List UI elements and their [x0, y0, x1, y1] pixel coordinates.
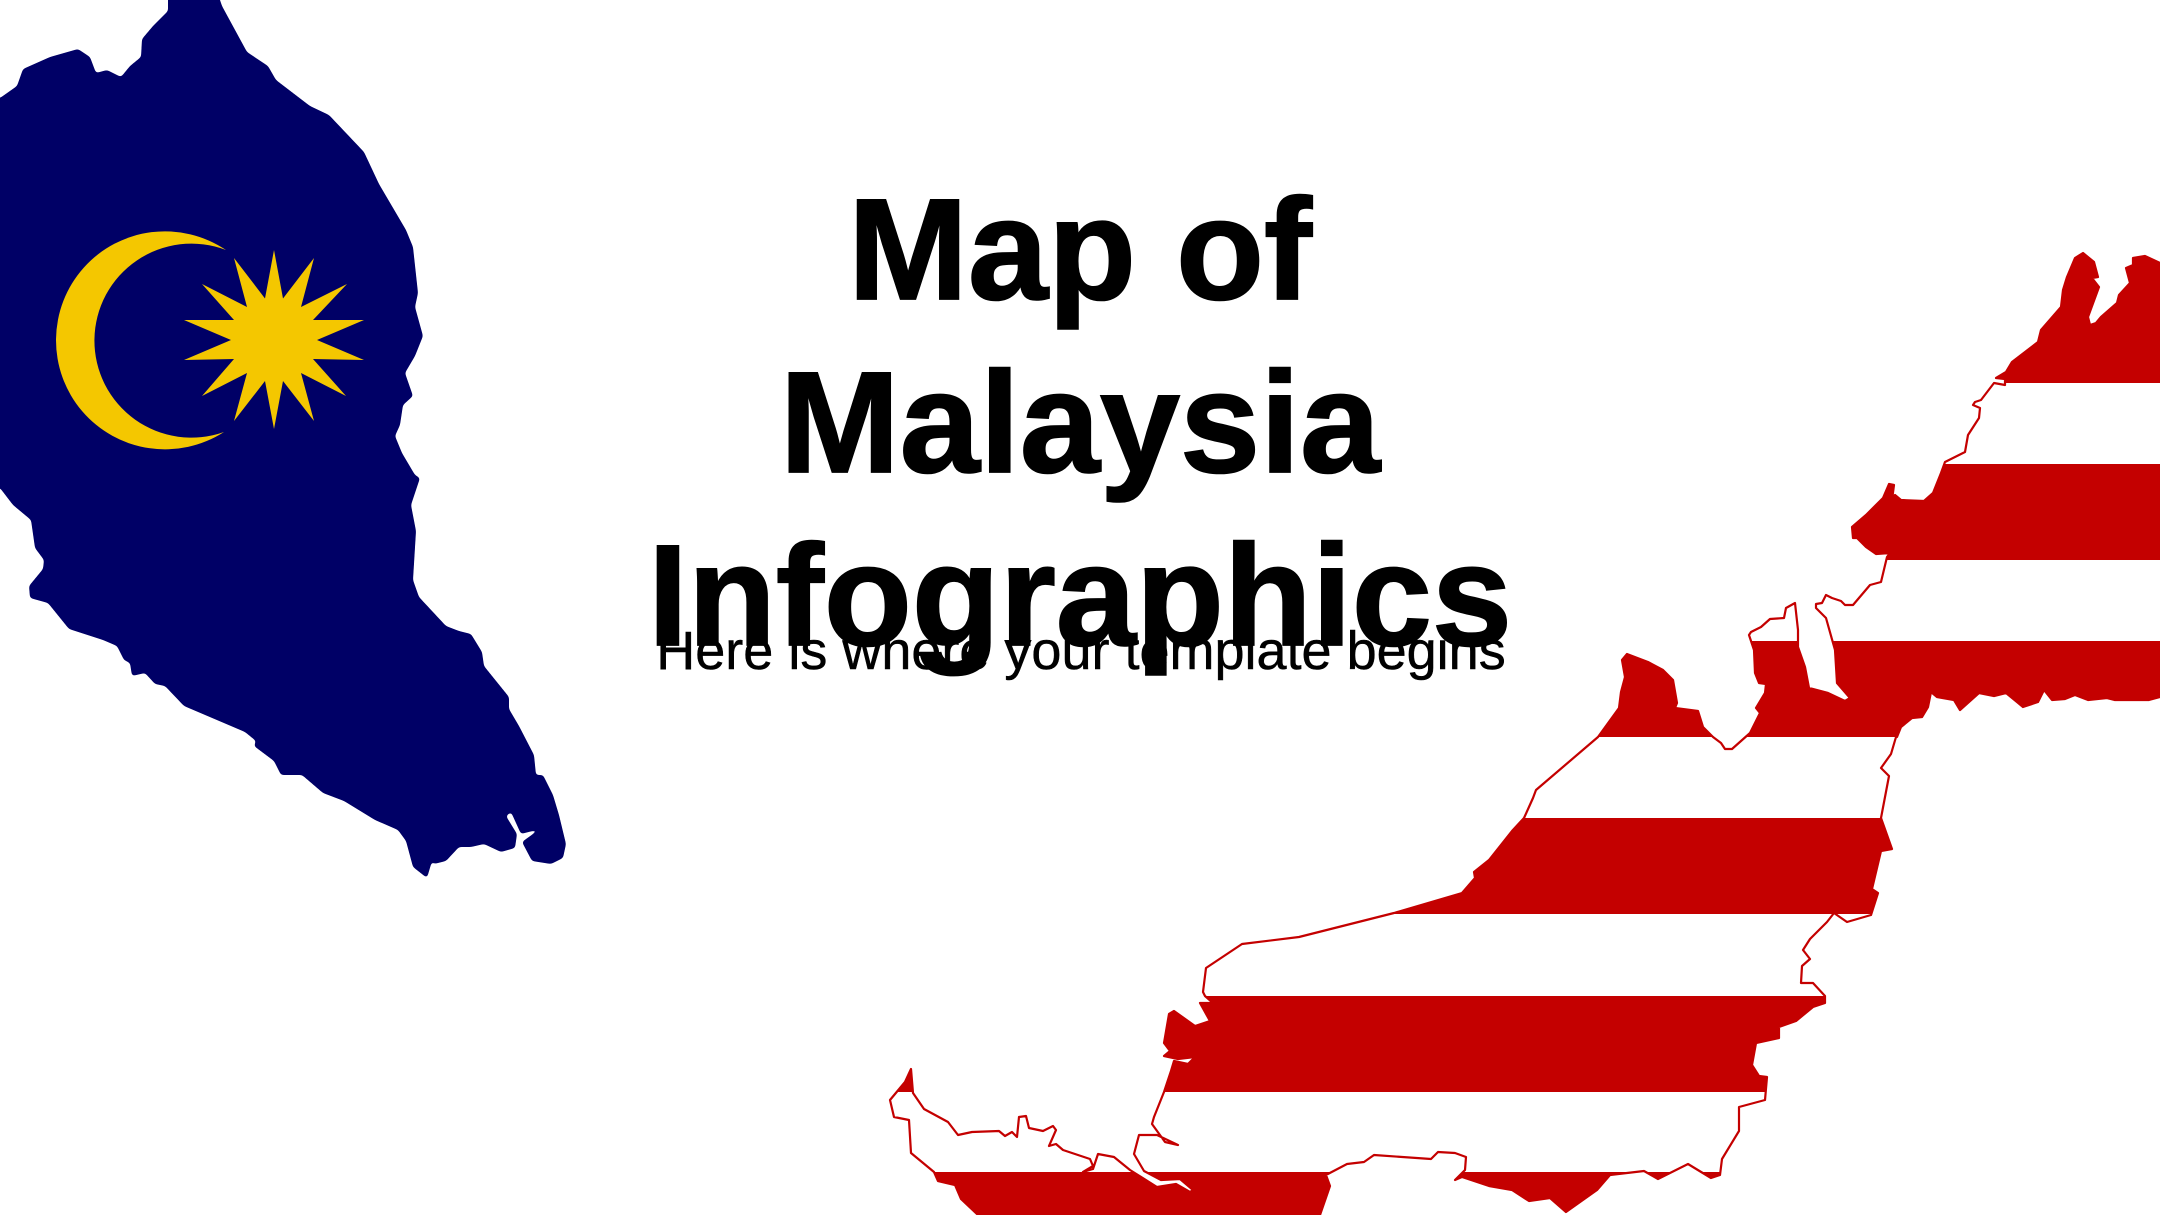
- map: Malaysia with red and white flag stripes: [880, 230, 2160, 1215]
- subtitle: Here is where your template begins: [656, 621, 1506, 681]
- title: [648, 169, 1512, 676]
- title: Malaysia: [780, 342, 1381, 503]
- icon: yellow crescent: [56, 231, 226, 449]
- title: Map of: [848, 169, 1313, 330]
- blue map silhouette: [0, 0, 566, 878]
- title: Infographics: [648, 515, 1512, 676]
- map: blue region with crescent and star: [0, 0, 566, 878]
- icon: fourteen-point star: [184, 250, 364, 429]
